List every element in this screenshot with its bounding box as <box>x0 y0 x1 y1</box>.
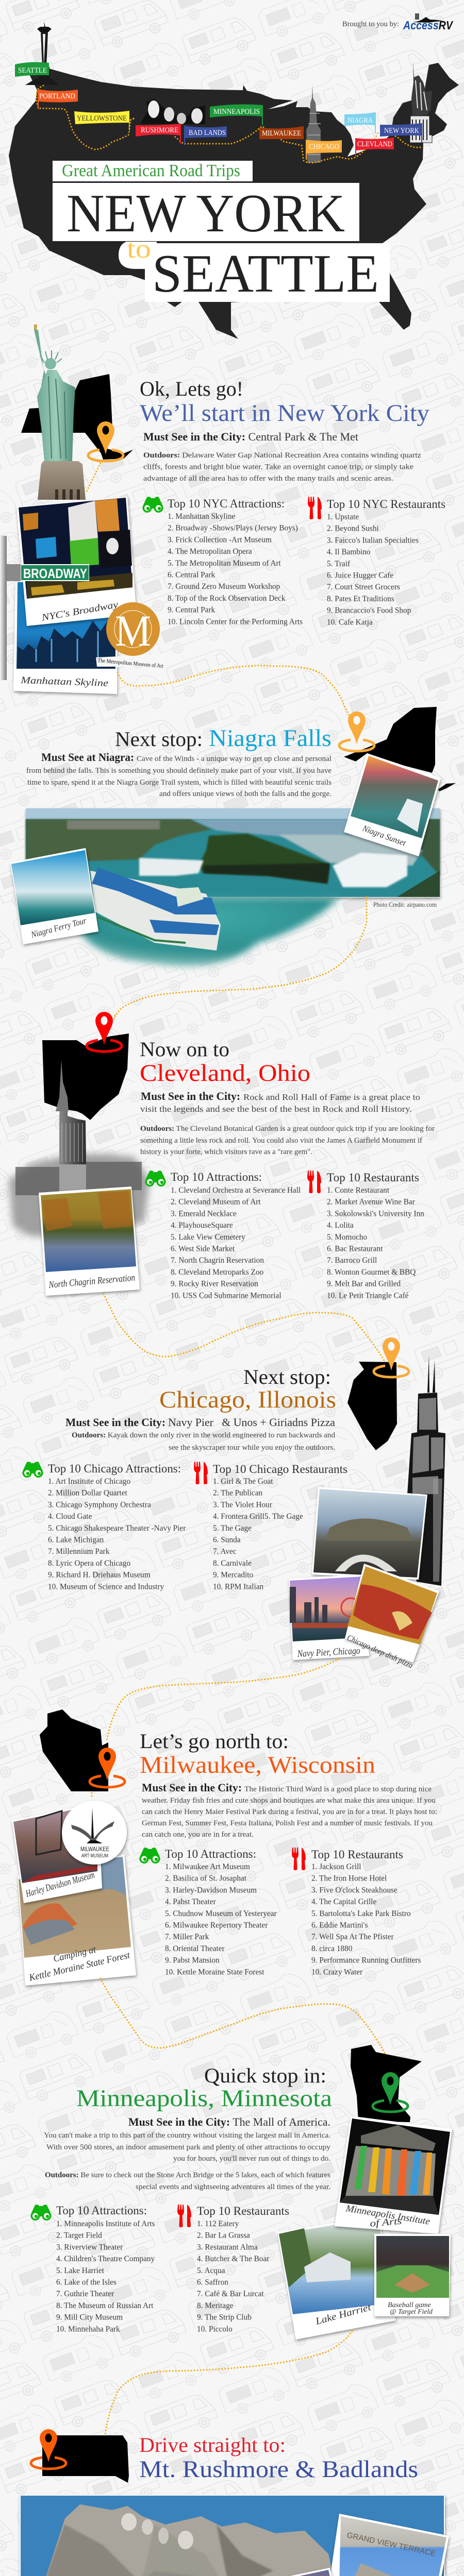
list: cleveland attractions: 5. Lake View Cemetery <box>171 1233 245 1242</box>
polaroid: niagra sunset: Niagra Sunset <box>361 823 408 848</box>
route dotted line <box>101 1978 385 2053</box>
heading: lets go north: Let’s go north to: <box>140 1730 289 1753</box>
logo: milwaukee art museum: ART MUSEUM <box>81 1853 108 1859</box>
icon: orange map pin <box>339 711 374 751</box>
list: cleveland attractions: 8. Cleveland Metroparks Zoo <box>171 1268 263 1277</box>
route dotted line <box>86 463 101 494</box>
flag: chicago <box>306 140 342 160</box>
flag: chicago: CHICAGO <box>309 143 339 151</box>
outdoors paragraph: history is your forte, which visitors rave as a "rare gem". <box>140 1148 312 1156</box>
list: nyc restaurants: 3. Faicco's Italian Specialties <box>327 536 419 545</box>
heading: ok lets go: Ok, Lets go! <box>140 377 243 400</box>
brought to you by logo: Brought to you by: <box>342 20 399 28</box>
outdoors paragraph <box>45 2171 330 2191</box>
flag: minneapolis <box>210 105 263 125</box>
heading: next stop: Next stop: <box>115 727 203 751</box>
polaroid: navy pier chicago: Navy Pier, Chicago <box>296 1646 360 1659</box>
outdoors paragraph <box>143 451 422 483</box>
list: minneapolis attractions: 2. Target Field <box>56 2231 102 2240</box>
heading: top chicago attractions: Top 10 Chicago Attractions: <box>48 1462 181 1475</box>
heading: mt rushmore and badlands: Mt. Rushmore & Badlands <box>139 2456 418 2483</box>
list: chicago restaurants: 6. Sunda <box>213 1535 241 1545</box>
flag: milwaukee: MILWAUKEE <box>262 129 301 138</box>
list: cleveland restaurants: 10. Le Petit Triangle Café <box>327 1291 409 1300</box>
list: nyc attractions: 6. Central Park <box>168 571 216 579</box>
must see text: Rock and Roll Hall of Fame is a great place to <box>243 1092 420 1102</box>
title: to: to <box>127 234 151 264</box>
list: minneapolis restaurants: 3. Restaurant Alma <box>197 2243 258 2251</box>
list: cleveland restaurants: 7. Barroco Grill <box>327 1256 377 1265</box>
list: cleveland restaurants: 3. Sokolowski's University Inn <box>327 1209 424 1218</box>
flag: clevland: CLEVLAND <box>357 140 392 148</box>
polaroid: manhattan skyline: Manhattan Skyline <box>20 675 108 689</box>
polaroid: mt rushmore: GRAND VIEW TERRACE <box>346 2531 437 2558</box>
list: milwaukee attractions: 3. Harley-Davidson Museum <box>165 1886 257 1894</box>
polaroid: mt rushmore <box>322 2514 449 2576</box>
list: chicago attractions: 2. Million Dollar Quartet <box>48 1489 128 1498</box>
polaroid: baseball game at target field <box>374 2234 451 2316</box>
list: nyc attractions: 5. The Metropolitan Museum of Art <box>168 559 281 568</box>
list: nyc attractions: 9. Central Park <box>168 606 216 615</box>
polaroid: harley davidson museum: Harley Davidson Museum <box>24 1870 96 1900</box>
icon: binoculars <box>22 1462 43 1478</box>
icon: illinois silhouette <box>347 1362 397 1450</box>
section: minneapolis <box>30 1978 452 2340</box>
outdoors paragraph: see the skyscraper tour while you enjoy the outdoors. <box>169 1444 335 1452</box>
list: cleveland attractions: 3. Emerald Necklace <box>171 1209 237 1218</box>
list: nyc attractions: 2. Broadway -Shows/Plays (Jersey Boys) <box>168 524 298 533</box>
outdoors paragraph: Outdoors: The Cleveland Botanical Garden is a great outdoor quick trip if you are looking for <box>140 1125 435 1133</box>
polaroid: minneapolis institute of arts: of Arts <box>370 2216 402 2229</box>
list: chicago restaurants: 5. The Gage <box>213 1524 252 1533</box>
list: milwaukee attractions: 8. Oriental Theater <box>165 1944 225 1953</box>
panorama photo: mount rushmore <box>20 2495 445 2576</box>
street pole <box>0 536 21 680</box>
polaroid: lake harriet: Lake Harriet <box>314 2302 372 2327</box>
chicago tower landmark <box>306 85 321 163</box>
caption: metropolitan museum: The Metropolitan Museum of Art <box>97 657 163 669</box>
section: new york city <box>0 325 445 694</box>
list: nyc attractions: 8. Top of the Rock Observation Deck <box>168 594 286 603</box>
section: milwaukee <box>12 1659 437 1986</box>
list: milwaukee restaurants: 5. Bartolotta's Lake Park Bistro <box>311 1909 411 1918</box>
list: nyc restaurants: 8. Pates Et Traditions <box>327 595 394 603</box>
list: minneapolis restaurants: 5. Acqua <box>197 2266 225 2275</box>
photo cutout: maid of the mist ferry <box>77 868 340 966</box>
route dotted line <box>91 1793 93 1799</box>
outdoors paragraph: advantage of all the area has to offer with the many trails and scenic areas. <box>143 474 393 483</box>
flag: seattle: SEATTLE <box>18 66 47 75</box>
heading: top restaurants: Top 10 Restaurants <box>327 1171 419 1184</box>
list: chicago attractions: 9. Richard H. Driehaus Museum <box>48 1571 151 1580</box>
list: chicago attractions: 3. Chicago Symphony Orchestra <box>48 1500 151 1509</box>
heading: now on to: Now on to <box>140 1038 229 1061</box>
mall paragraph: you for hours, you'll never run out of things to do. <box>173 2155 330 2163</box>
list: cleveland restaurants: 1. Conte Restaurant <box>327 1186 390 1195</box>
list: minneapolis restaurants: 2. Bar La Grassa <box>197 2231 250 2240</box>
list: cleveland restaurants: 2. Market Avenue Wine Bar <box>327 1198 415 1207</box>
flag: minneapolis: MINNEAPOLIS <box>213 108 260 116</box>
section: niagra falls <box>10 666 456 1019</box>
list: minneapolis restaurants: 1. 112 Eatery <box>197 2219 239 2228</box>
tower spire <box>56 1060 69 1111</box>
list: minneapolis attractions: 5. Lake Harriet <box>56 2266 105 2275</box>
list: chicago restaurants: 8. Carnivale <box>213 1559 252 1568</box>
polaroid: cloud gate <box>312 1487 427 1580</box>
heading: top nyc restaurants: Top 10 NYC Restaurants <box>327 498 445 511</box>
icon: orange map pin <box>88 421 123 461</box>
must see text: visit the legends and see the best of the best in Rock and Roll History. <box>140 1104 412 1114</box>
polaroid: chicago deep dish pizza <box>345 1564 439 1670</box>
polaroid: minneapolis institute of arts <box>335 2116 452 2234</box>
statue of liberty landmark <box>410 61 432 143</box>
flag: rushmore: RUSHMORE <box>141 126 178 134</box>
flag: bad lands <box>184 126 227 145</box>
list: cleveland attractions: 9. Rocky River Reservation <box>171 1280 258 1289</box>
outdoors paragraph: cliffs, forests and bright blue water. Take an overnight canoe trip, or simply take <box>143 463 413 471</box>
flag: yellowstone <box>74 111 129 130</box>
flag: new york: NEW YORK <box>384 127 419 135</box>
heading: milwaukee wisconsin: Milwaukee, Wisconsin <box>140 1752 375 1778</box>
list: cleveland restaurants: 4. Lolita <box>327 1221 354 1230</box>
list: nyc restaurants: 5. Traif <box>327 560 351 568</box>
list: cleveland restaurants: 5. Momocho <box>327 1233 368 1242</box>
must see text: Must See in the City: <box>141 1090 240 1103</box>
polaroid: baseball game at target field: @ Target Field <box>390 2308 433 2316</box>
list: milwaukee attractions: 4. Pabst Theater <box>165 1897 216 1906</box>
polaroid: niagra sunset <box>344 753 441 856</box>
polaroid: north chagrin reservation: North Chagrin Reservation <box>48 1272 136 1291</box>
list: cleveland restaurants: 8. Wonton Gourmet & BBQ <box>327 1268 416 1277</box>
list: minneapolis attractions: 6. Lake of the Isles <box>56 2278 117 2286</box>
list: minneapolis attractions: 4. Children's Theatre Company <box>56 2255 155 2263</box>
icon: binoculars <box>142 497 163 513</box>
route dotted line <box>114 897 367 1019</box>
mount rushmore heads landmark <box>140 99 205 124</box>
polaroid: nyc's broadway: NYC's Broadway <box>40 599 119 623</box>
heading: top restaurants: Top 10 Restaurants <box>311 1848 403 1861</box>
list: milwaukee restaurants: 10. Crazy Water <box>311 1968 362 1976</box>
icon: green map pin <box>373 2072 408 2112</box>
sign: broadway: BROADWAY <box>23 566 87 581</box>
heading: top restaurants: Top 10 Restaurants <box>197 2205 289 2217</box>
icon: fork and knife <box>194 1462 208 1484</box>
must see text: German Fest, Summer Fest, Festa Italiana, Polish Fest and a number of music festivals. If you <box>142 1819 433 1827</box>
list: chicago restaurants: 10. RPM Italian <box>213 1582 264 1591</box>
list: minneapolis restaurants: 9. The Strip Club <box>197 2313 252 2322</box>
list: minneapolis attractions: 8. The Museum of Russian Art <box>56 2301 154 2310</box>
must see text <box>140 1090 420 1114</box>
must see text: can catch the Henry Maier Festival Park during a festival, you are in for a treat. It plays host to: <box>142 1808 437 1816</box>
icon: south dakota silhouette <box>42 2435 129 2483</box>
title: new york: NEW YORK <box>67 183 345 243</box>
icon: fork and knife <box>307 1171 321 1193</box>
heading: top attractions: Top 10 Attractions: <box>171 1171 262 1183</box>
must see text: Must See in the City: <box>65 1416 165 1429</box>
route dotted line <box>104 1294 385 1361</box>
polaroid: baseball game at target field: Baseball game <box>388 2301 431 2309</box>
list: nyc attractions: 10. Lincoln Center for the Performing Arts <box>168 617 303 626</box>
must see text: The Historic Third Ward is a good place to stop during nice <box>244 1785 432 1793</box>
list: minneapolis attractions: 7. Guthrie Theater <box>56 2290 114 2298</box>
list: cleveland restaurants: 6. Bac Restaurant <box>327 1245 383 1253</box>
polaroid: manhattan skyline <box>13 582 118 694</box>
logo: milwaukee art museum <box>62 1801 127 1865</box>
must see text: Navy Pier & Unos + Giriadns Pizza <box>168 1416 335 1429</box>
list: chicago attractions: 8. Lyric Opera of Chicago <box>48 1559 130 1568</box>
flag: niagra: NIAGRA <box>347 116 373 125</box>
heading: quick stop in: Quick stop in: <box>204 2064 326 2087</box>
route dotted line <box>118 666 349 715</box>
outdoors paragraph: something a little less rock and roll. You could also visit the James A Garfield Monument if <box>140 1137 422 1145</box>
list: minneapolis attractions: 9. Mill City Museum <box>56 2313 123 2322</box>
polaroid: chicago deep dish pizza: Chicago deep dish pizza <box>345 1633 414 1670</box>
section: mount rushmore and badlands <box>20 2331 449 2576</box>
list: cleveland attractions: 4. PlayhouseSquare <box>171 1221 233 1230</box>
polaroid: niagra ferry tour <box>10 848 98 944</box>
list: chicago restaurants: 7. Avec <box>213 1547 237 1556</box>
list: nyc attractions: 4. The Metropolitan Opera <box>168 547 252 556</box>
hero section: title and route map <box>9 13 459 339</box>
flag: seattle <box>15 62 49 77</box>
flag: rushmore <box>136 124 181 144</box>
must see text <box>142 1781 437 1839</box>
list: nyc attractions: 7. Ground Zero Museum Workshop <box>168 582 280 591</box>
USA silhouette map <box>9 63 459 339</box>
list: nyc restaurants: 2. Beyond Sushi <box>327 524 379 533</box>
must see text: time to spare, spend it at the Niagra Gorge Trail system, which is filled with beautiful scenic trails <box>27 778 332 787</box>
must see text <box>65 1416 335 1429</box>
flag: clevland <box>355 138 394 157</box>
photo cutout: willis tower <box>407 1355 445 1586</box>
list: chicago restaurants: 2. The Publican <box>213 1489 263 1498</box>
icon: ohio silhouette <box>42 1033 129 1120</box>
list: milwaukee restaurants: 1. Jackson Grill <box>311 1862 361 1871</box>
route dotted line <box>107 1659 339 1741</box>
must see text <box>26 751 332 798</box>
polaroid: niagra ferry tour: Niagra Ferry Tour <box>29 916 88 940</box>
list: nyc restaurants: 4. Il Bambino <box>327 548 371 556</box>
icon: orange map pin <box>374 1337 409 1377</box>
flag: yellowstone: YELLOWSTONE <box>77 114 127 123</box>
icon: binoculars <box>139 1848 160 1863</box>
heading: top chicago restaurants: Top 10 Chicago Restaurants <box>213 1463 347 1476</box>
must see text: from behind the falls. This is something you should definitely make part of your visit. If you have <box>26 767 332 775</box>
list: milwaukee restaurants: 3. Five O'clock Steakhouse <box>311 1886 397 1894</box>
heading: top attractions: Top 10 Attractions: <box>56 2204 147 2217</box>
heading: chicago illinois: Chicago, Illonois <box>159 1386 336 1413</box>
must see text: Cave of the Winds - a unique way to get up close and personal <box>137 755 332 763</box>
icon: new york state silhouette <box>21 374 133 460</box>
list: nyc restaurants: 1. Upstate <box>327 513 359 521</box>
polaroid: harley davidson museum <box>12 1803 102 1903</box>
list: chicago restaurants: 1. Girl & The Goat <box>213 1477 273 1486</box>
title: seattle: SEATTLE <box>152 243 379 303</box>
must see text: weather. Friday fish fries and cute shops and boutiques are what make this area unique. If you <box>142 1797 436 1805</box>
list: chicago attractions: 7. Millennium Park <box>48 1547 110 1556</box>
list: cleveland attractions: 6. West Side Market <box>171 1245 235 1253</box>
list: cleveland attractions: 7. North Chagrin Reservation <box>171 1256 264 1265</box>
list: milwaukee attractions: 7. Miller Park <box>165 1933 209 1941</box>
list: chicago attractions: 4. Cloud Gate <box>48 1512 92 1521</box>
outdoors paragraph: Outdoors: Kayak down the only river in the world engineered to run backwards and <box>72 1431 336 1439</box>
heading: we'll start in new york city: We’ll start in New York City <box>140 400 430 427</box>
heading: top attractions: Top 10 Attractions: <box>165 1848 256 1860</box>
list: minneapolis attractions: 10. Minnehaha Park <box>56 2325 120 2333</box>
flag: niagra <box>344 112 376 133</box>
list: milwaukee attractions: 9. Pabst Mansion <box>165 1956 220 1965</box>
photo credit: Photo Credit: airpano.com <box>373 901 437 908</box>
list: milwaukee restaurants: 4. The Capital Grille <box>311 1897 377 1906</box>
heading: next stop: Next stop: <box>243 1365 331 1388</box>
brought to you by logo: AccessRV <box>403 19 453 32</box>
polaroid: navy pier chicago <box>289 1574 369 1660</box>
polaroid: badlands national park <box>242 2568 352 2576</box>
polaroid: camping at kettle moraine: Camping at <box>52 1944 97 1964</box>
heading: drive straight to: Drive straight to: <box>139 2433 286 2456</box>
list: minneapolis restaurants: 4. Butcher & The Boar <box>197 2255 269 2263</box>
list: milwaukee attractions: 5. Chudnow Museum of Yesteryear <box>165 1909 277 1918</box>
icon: new york state silhouette <box>344 707 456 791</box>
route dotted line <box>105 2331 352 2434</box>
list: minneapolis attractions: 1. Minneapolis Institute of Arts <box>56 2219 155 2228</box>
list: milwaukee restaurants: 9. Performance Running Outfitters <box>311 1956 421 1965</box>
heading: niagra falls: Niagra Falls <box>209 725 332 752</box>
polaroid: camping at kettle moraine: Kettle Moraine State Forest <box>27 1950 131 1984</box>
polaroid: nyc's broadway <box>16 497 137 626</box>
polaroid: lake harriet <box>277 2216 396 2340</box>
polaroid: minneapolis institute of arts: Minneapolis Institute <box>344 2203 430 2227</box>
outdoors paragraph <box>72 1431 336 1452</box>
route dotted line on map <box>37 85 420 163</box>
list: milwaukee attractions: 6. Milwaukee Repertory Theater <box>165 1921 268 1930</box>
list: chicago attractions: 6. Lake Michigan <box>48 1535 104 1545</box>
polaroid: north chagrin reservation <box>39 1187 140 1296</box>
heading: cleveland ohio: Cleveland, Ohio <box>140 1060 310 1087</box>
list: nyc attractions: 1. Manhattan Skyline <box>168 512 235 521</box>
caption: metropolitan museum <box>96 654 166 669</box>
list: nyc attractions: 3. Frick Collection -Art Museum <box>168 535 272 544</box>
photo cutout: terminal tower <box>9 1060 150 1236</box>
list: minneapolis restaurants: 8. Meritage <box>197 2301 234 2310</box>
list: nyc restaurants: 9. Brancaccio's Food Shop <box>327 606 411 615</box>
icon: orange-red map pin <box>31 2429 66 2469</box>
list: nyc restaurants: 7. Court Street Grocers <box>327 583 400 591</box>
must see text: Must See at Niagra: <box>41 751 134 764</box>
must see text: Must See in the City: The Mall of America. <box>128 2115 330 2128</box>
list: nyc restaurants: 6. Juice Hugger Cafe <box>327 571 393 580</box>
must see text: Must See in the City: Central Park & The Met <box>143 430 358 443</box>
must see text: can catch one, you are in for a treat. <box>142 1831 254 1839</box>
list: chicago restaurants: 4. Frontera Grill5. The Gage <box>213 1512 303 1521</box>
list: milwaukee attractions: 10. Kettle Moraine State Forest <box>165 1968 264 1976</box>
section: cleveland <box>9 1012 435 1361</box>
outdoors paragraph: Outdoors: Delaware Water Gap National Recreation Area contains winding quartz <box>143 451 422 460</box>
mall paragraph <box>44 2131 331 2163</box>
list: cleveland attractions: 10. USS Cod Submarine Memorial <box>171 1291 281 1300</box>
list: milwaukee attractions: 1. Milwaukee Art Museum <box>165 1862 250 1871</box>
space needle landmark <box>25 21 59 85</box>
icon: fork and knife <box>308 497 322 519</box>
icon: binoculars <box>145 1171 166 1187</box>
subtitle: great american road trips: Great American Road Trips <box>62 161 240 180</box>
brought to you by logo <box>342 13 453 32</box>
logo: the met <box>106 602 160 656</box>
heading: top nyc attractions: Top 10 NYC Attractions: <box>168 497 285 510</box>
mall paragraph: You can't make a trip to this part of the country without visiting the largest mall in America. <box>44 2131 330 2140</box>
list: milwaukee restaurants: 7. Well Spa At The Pfister <box>311 1933 394 1941</box>
list: cleveland restaurants: 9. Melt Bar and Grilled <box>327 1280 401 1289</box>
icon: wisconsin silhouette <box>40 1709 108 1791</box>
heading: minneapolis minnesota: Minneapolis, Minnesota <box>76 2085 332 2112</box>
icon: fork and knife <box>177 2205 191 2227</box>
flag: bad lands: BAD LANDS <box>189 129 226 137</box>
must see text: Must See in the City: <box>142 1781 242 1794</box>
list: chicago restaurants: 3. The Violet Hour <box>213 1500 272 1509</box>
list: milwaukee restaurants: 8. circa 1880 <box>311 1944 353 1953</box>
list: minneapolis restaurants: 10. Piccolo <box>197 2325 233 2333</box>
statue of liberty photo cutout <box>34 325 86 500</box>
outdoors paragraph: Outdoors: Be sure to check out the Stone Arch Bridge or the 5 lakes, each of which features <box>45 2171 330 2179</box>
logo: the met: M <box>115 606 151 655</box>
panorama photo: niagara falls <box>26 808 440 897</box>
flag: portland <box>38 89 78 109</box>
icon: minnesota silhouette <box>351 2045 422 2122</box>
section: chicago <box>22 1337 445 1670</box>
polaroid: camping at kettle moraine <box>18 1855 136 1986</box>
icon: binoculars <box>30 2205 52 2221</box>
flag: new york <box>380 123 422 143</box>
outdoors paragraph <box>140 1125 435 1156</box>
route dotted line <box>114 1014 115 1019</box>
list: cleveland attractions: 2. Cleveland Museum of Art <box>171 1198 261 1207</box>
list: chicago attractions: 5. Chicago Shakespeare Theater -Navy Pier <box>48 1524 186 1533</box>
icon: fork and knife <box>292 1848 306 1870</box>
list: minneapolis restaurants: 6. Saffron <box>197 2278 228 2286</box>
list: chicago restaurants: 9. Mercadito <box>213 1571 254 1580</box>
list: nyc restaurants: 10. Cafe Katja <box>327 618 373 626</box>
must see text: and offers unique views of both the falls and the gorge. <box>159 790 332 798</box>
list: cleveland attractions: 1. Cleveland Orchestra at Severance Hall <box>171 1186 301 1195</box>
list: chicago attractions: 10. Museum of Science and Industry <box>48 1582 164 1591</box>
list: milwaukee restaurants: 6. Eddie Martini's <box>311 1921 368 1930</box>
list: minneapolis restaurants: 7. Café & Bar Lurcat <box>197 2290 264 2298</box>
mall paragraph: With over 500 stores, an indoor amusement park and plenty of other attractions to occupy <box>46 2143 331 2151</box>
flag: portland: PORTLAND <box>39 92 75 100</box>
logo: milwaukee art museum: MILWAUKEE <box>80 1845 109 1853</box>
list: milwaukee restaurants: 2. The Iron Horse Hotel <box>311 1874 387 1883</box>
flag: milwaukee <box>259 126 304 139</box>
outdoors paragraph: special events and sightseeing adventures all times of the year. <box>136 2183 330 2191</box>
icon: orange-red map pin <box>90 1748 125 1787</box>
list: minneapolis attractions: 3. Riverview Theater <box>56 2243 123 2251</box>
list: milwaukee attractions: 2. Basilica of St. Josaphat <box>165 1874 247 1883</box>
list: chicago attractions: 1. Art Institute of Chicago <box>48 1477 131 1486</box>
icon: red map pin <box>87 1012 122 1052</box>
